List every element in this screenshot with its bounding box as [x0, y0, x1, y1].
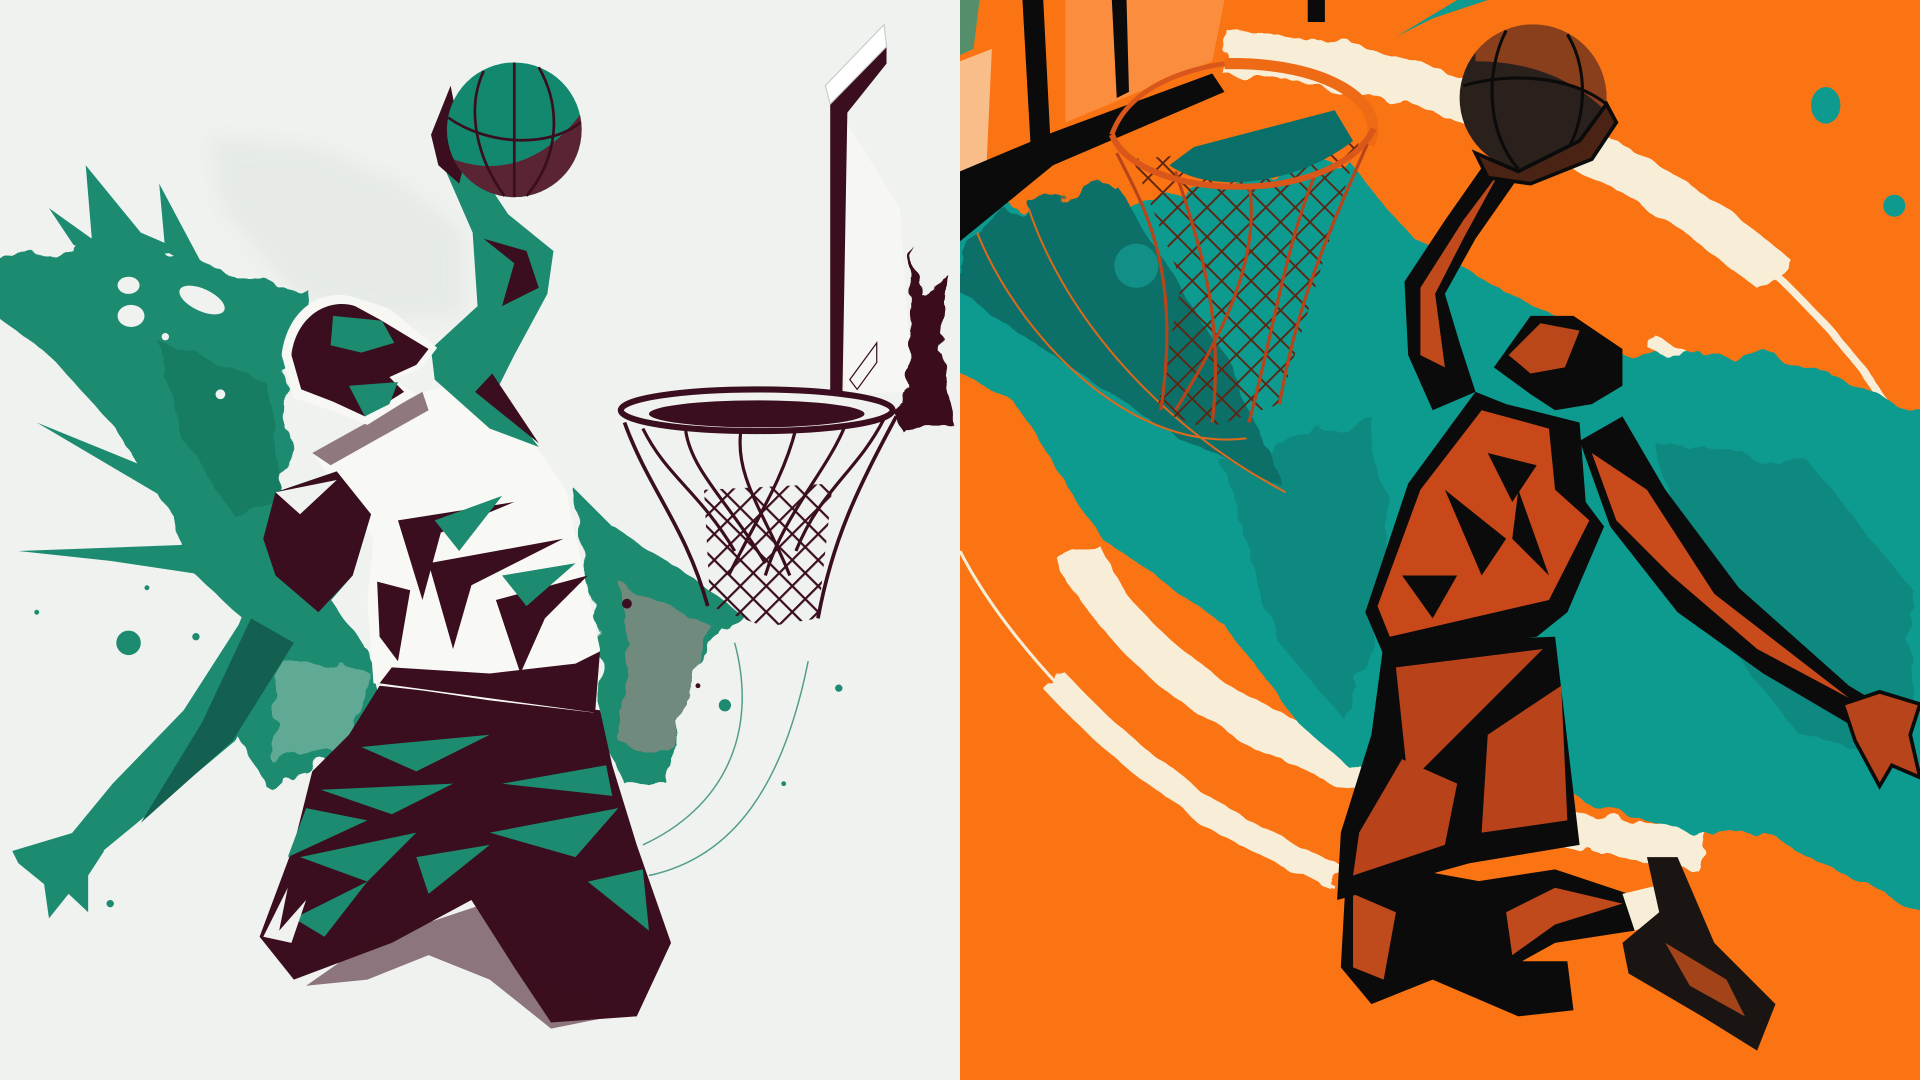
player: shorts	[260, 686, 671, 1022]
cream splatter top left	[960, 0, 1224, 184]
pale halftone cloud	[222, 146, 456, 310]
green paint splash left	[0, 233, 373, 784]
player: jersey	[1365, 392, 1604, 655]
green streak spikes	[18, 165, 842, 907]
player: far arm to right	[1580, 416, 1920, 786]
backboard	[825, 24, 958, 429]
cream arc lower	[1053, 551, 1702, 876]
teal spots	[1396, 0, 1905, 217]
hoop and net	[1112, 64, 1374, 429]
player: shorts	[1337, 637, 1580, 900]
player: lower arm	[12, 471, 371, 918]
panel: right orange illustration	[931, 0, 1920, 1080]
icon: green basketball	[430, 62, 582, 198]
cream arc upper	[1224, 51, 1898, 422]
hoop and net	[621, 389, 896, 627]
player: head	[1494, 316, 1622, 410]
icon: dark basketball	[1460, 24, 1616, 184]
panel: left green illustration	[0, 0, 960, 1080]
green paint splash right	[569, 484, 741, 784]
dark teal court shadow	[960, 184, 1286, 492]
shorts frayed shadow	[306, 599, 700, 1029]
backboard	[960, 0, 1325, 241]
player: head	[282, 295, 437, 425]
white paint spots	[118, 277, 229, 399]
player: legs and shoes	[1341, 857, 1776, 1051]
player: raised arm	[1404, 159, 1518, 410]
thin swirl lines	[643, 643, 808, 876]
teal paint splash	[931, 159, 1920, 931]
player: raised arm	[431, 159, 553, 447]
player: jersey	[312, 377, 600, 713]
